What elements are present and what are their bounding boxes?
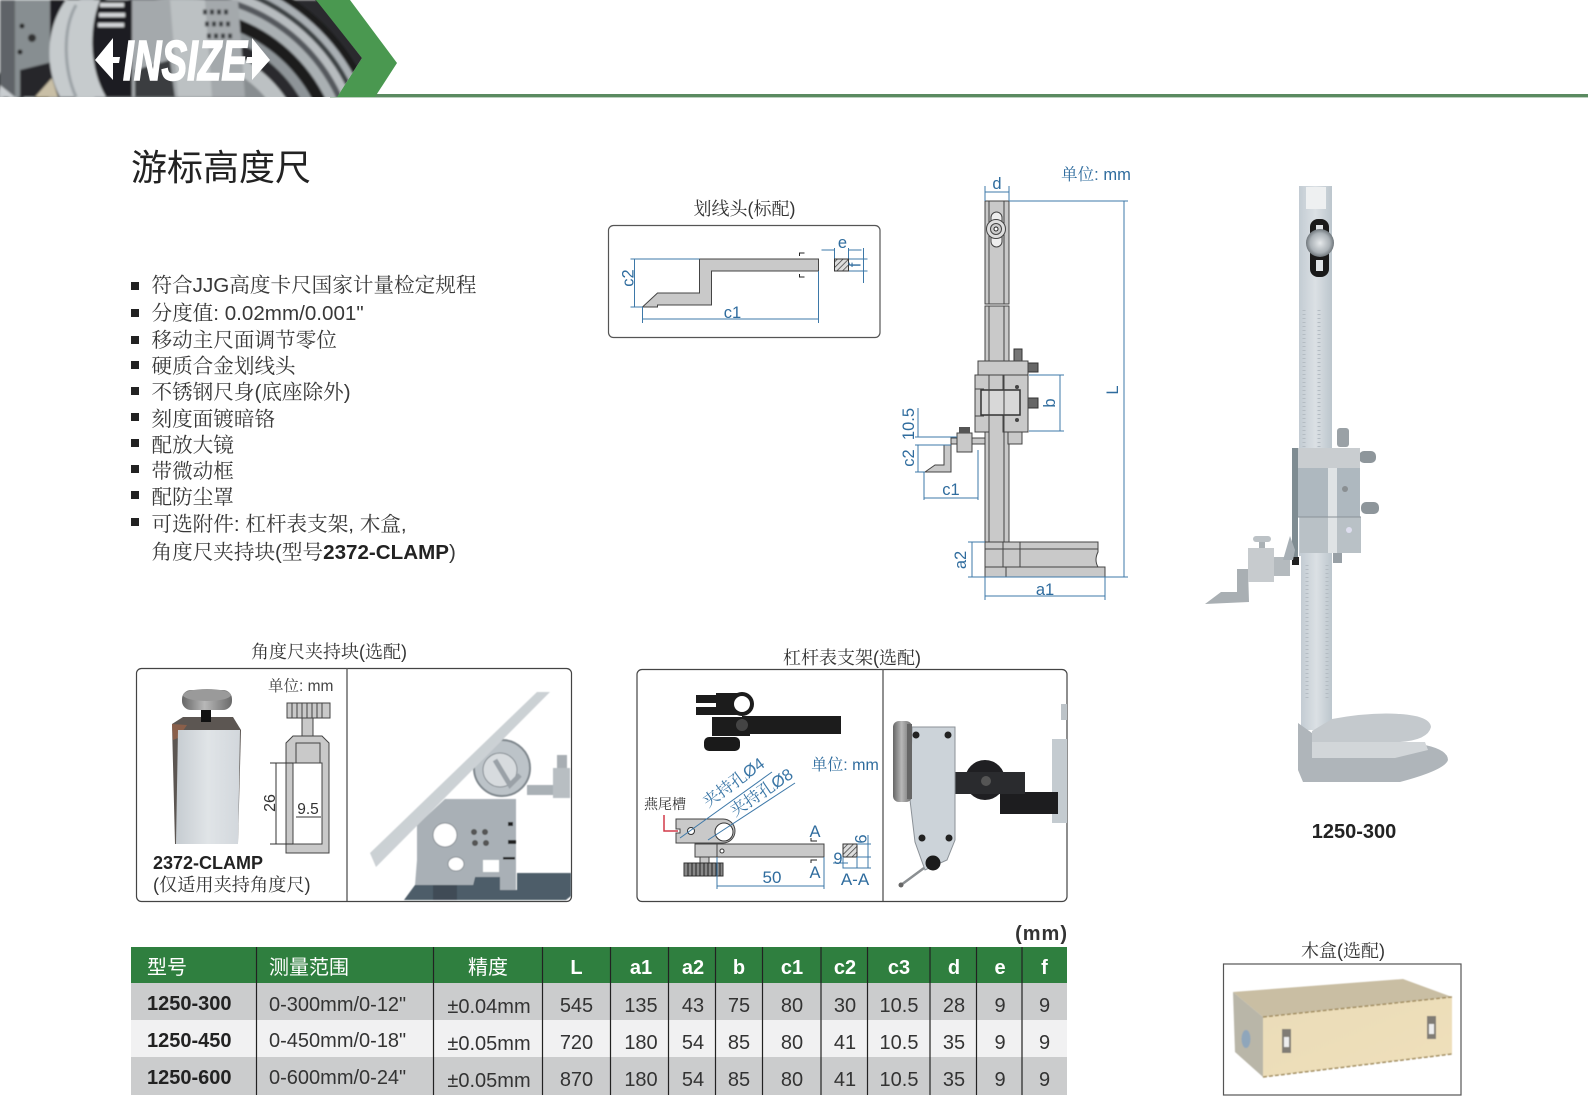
table row: 1250-300: 10.5 [880,995,918,1017]
table row: 1250-450: 0-450mm/0-18" [269,1030,406,1052]
table row: 1250-300: 1250-300 [147,993,232,1015]
scriber heading: 划线头(标配) [694,199,796,219]
specification table [131,947,1067,1095]
panel: scriber [608,199,880,338]
table row: 1250-600: 9 [994,1069,1006,1091]
feature text: 分度值: 0.02mm/0.001" [152,302,364,325]
panel: wooden case [1224,941,1461,1095]
unit note: (mm) [1015,923,1068,945]
table row: 1250-600: 870 [560,1069,593,1091]
table row: 1250-450: 1250-450 [147,1030,232,1052]
dovetail leader [664,815,678,831]
table row: 1250-300: 75 [728,995,750,1017]
product photo: height gauge [1205,186,1448,782]
table row: 1250-450: 180 [624,1032,658,1054]
table row: 1250-450: 85 [728,1032,750,1054]
table row: 1250-300: 9 [994,995,1006,1017]
gauge column [1299,186,1332,730]
table header row: 型号 [147,956,187,979]
table row: 1250-600: 0-600mm/0-24" [269,1067,406,1089]
table row: 1250-600: ±0.05mm [447,1070,531,1092]
case heading: 木盒(选配) [1301,941,1385,961]
clamp drawing [262,703,330,853]
drawing dimensions: b [1041,398,1059,408]
table header row: 精度 [468,956,508,979]
table header row: a2 [682,957,704,979]
table row: 1250-450 [131,1020,1067,1057]
table row: 1250-600: 85 [728,1069,750,1091]
gauge scriber [1205,536,1295,604]
section view A-A: A-A [841,870,870,889]
table row: 1250-600: 41 [834,1069,856,1091]
section view A-A [833,834,871,889]
unit label: 单位: mm [1061,165,1131,184]
machinery photo [0,0,362,97]
bracket drawing: 夹持孔Ø4 [699,754,768,811]
clamp heading: 角度尺夹持块(选配) [251,642,407,662]
scriber dimensions: c1 [724,304,741,322]
feature text: 符合JJG高度卡尺国家计量检定规程 [152,274,477,297]
table row: 1250-450: 10.5 [880,1032,918,1054]
table row: 1250-300: ±0.04mm [447,996,531,1018]
panel: lever indicator bracket [637,648,1067,902]
table header row: c3 [888,957,910,979]
table header row: c2 [834,957,856,979]
scriber frame [608,226,880,338]
bracket frame [637,670,1067,902]
clamp drawing: 26 [262,794,279,812]
table header row: c1 [781,957,803,979]
logo left arrow [95,38,120,80]
bracket drawing [644,754,871,889]
clamp photo [172,689,241,844]
clamp drawing: 9.5 [297,801,319,818]
scriber dimensions: f [846,262,864,267]
table row: 1250-600 [131,1057,1067,1095]
table row: 1250-300: 43 [682,995,704,1017]
feature text: 带微动框 [152,460,234,483]
height gauge technical drawing [900,175,1128,600]
table row: 1250-600: 1250-600 [147,1067,232,1089]
table row: 1250-450: 41 [834,1032,856,1054]
gauge base [1298,714,1448,782]
feature list [131,274,477,564]
table row: 1250-300: 9 [1039,995,1050,1017]
table header row [131,947,1067,983]
feature text: 可选附件: 杠杆表支架, 木盒, [152,512,407,536]
clamp model: 2372-CLAMP [153,853,263,873]
green chevron [315,0,397,97]
section view A-A: 9 [833,850,843,868]
header rule [330,94,1588,97]
table row: 1250-600: 54 [682,1069,704,1091]
table row: 1250-300: 545 [560,995,593,1017]
bracket drawing: A [809,864,821,882]
table header row: d [948,957,960,979]
table row: 1250-600: 9 [1039,1069,1050,1091]
bracket divider [882,669,884,901]
gauge clamp knob [1306,219,1334,277]
scriber dimensions: e [838,234,847,252]
drawing dimensions: a2 [952,551,970,569]
table header row: f [1041,957,1048,979]
scriber blade drawing [642,259,818,307]
table header row: L [570,957,583,979]
bracket unit label: 单位: mm [811,756,879,774]
slider [975,349,1038,444]
title: 游标高度尺 [131,147,311,188]
base [985,542,1105,577]
dovetail label: 燕尾槽 [644,796,686,812]
bracket drawing: 50 [763,868,781,887]
clamp unit label: 单位: mm [268,677,333,695]
feature text: 不锈钢尺身(底座除外) [152,381,351,404]
feature text: 角度尺夹持块(型号2372-CLAMP) [152,541,456,564]
scriber dimensions [620,234,868,323]
table header row: a1 [630,957,652,979]
table row: 1250-450: 54 [682,1032,704,1054]
table row: 1250-300: 28 [943,995,965,1017]
table row: 1250-300 [131,983,1067,1020]
bracket photo [696,692,841,751]
logo right arrow [246,38,270,80]
table row: 1250-450: 80 [781,1032,803,1054]
table row: 1250-300: 80 [781,995,803,1017]
case frame [1224,964,1461,1095]
feature text [152,274,477,564]
logo wordmark: INSIZE [123,29,248,93]
drawing dimensions: a1 [1036,581,1054,599]
drawing dimensions: 10.5 [900,408,918,440]
table row: 1250-600: 35 [943,1069,965,1091]
panel: angle ruler clamp [136,642,572,902]
product label: 1250-300 [1312,821,1396,843]
gauge slider [1292,428,1379,565]
table header row: b [733,957,745,979]
column [985,201,1009,542]
table row: 1250-450: 720 [560,1032,593,1054]
feature text: 硬质合金划线头 [152,355,296,378]
table header row: e [994,957,1006,979]
bracket drawing: 夹持孔Ø8 [727,765,797,820]
table row: 1250-450: 35 [943,1032,965,1054]
feature text: 配防尘罩 [152,486,234,509]
table header row: 测量范围 [269,956,349,979]
feature text: 刻度面镀暗铬 [152,408,275,431]
table row: 1250-450: ±0.05mm [447,1033,531,1055]
scriber dimensions: c2 [620,269,638,287]
table row: 1250-300: 0-300mm/0-12" [269,994,406,1016]
table row: 1250-600: 80 [781,1069,803,1091]
scriber clamp [925,427,985,472]
drawing dimensions [900,175,1128,600]
table row: 1250-300: 135 [624,995,658,1017]
table row: 1250-450: 9 [994,1032,1006,1054]
angle ruler photo [370,692,571,900]
clamp divider [346,668,348,901]
bracket heading: 杠杆表支架(选配) [783,648,921,668]
feature text: 移动主尺面调节零位 [152,329,337,352]
indicator photo [893,704,1067,888]
section view A-A: 9 [851,834,869,844]
header banner [0,0,1588,98]
table row: 1250-300: 30 [834,995,856,1017]
case photo [1233,979,1452,1077]
bracket drawing: A [809,823,821,841]
table row: 1250-600: 180 [624,1069,658,1091]
table row: 1250-450: 9 [1039,1032,1050,1054]
drawing dimensions: L [1104,385,1122,395]
bullet markers [131,282,139,526]
INSIZE logo [95,29,270,93]
drawing dimensions: c2 [900,449,918,467]
feature text: 配放大镜 [152,434,234,457]
table row: 1250-600: 10.5 [880,1069,918,1091]
drawing dimensions: d [992,175,1002,193]
clamp frame [136,668,572,902]
clamp note: (仅适用夹持角度尺) [153,875,311,895]
drawing dimensions: c1 [942,481,960,499]
